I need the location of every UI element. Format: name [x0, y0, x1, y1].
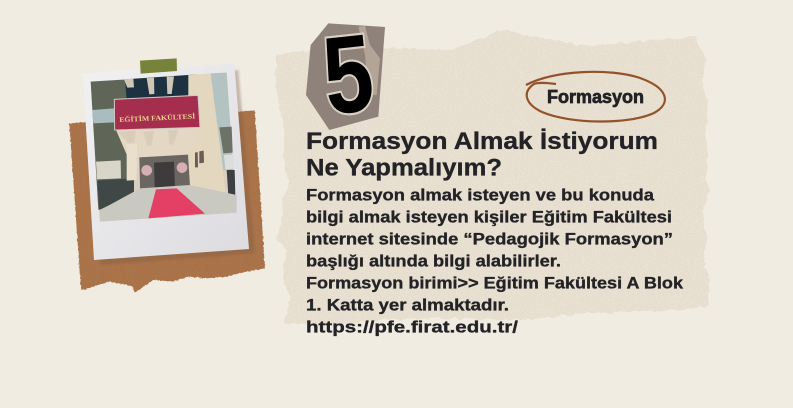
badge label: Formasyon	[547, 86, 644, 107]
badge: Formasyon in hand-drawn oval	[526, 72, 665, 122]
body text	[306, 186, 684, 336]
photo: building entrance	[91, 73, 237, 222]
body text: internet sitesinde “Pedagojik Formasyon”	[306, 230, 673, 248]
red building sign	[114, 95, 200, 130]
body text: 1. Katta yer almaktadır.	[306, 296, 509, 314]
panel: polaroid photo	[83, 58, 255, 265]
sign lettering: EĞİTİM FAKÜLTESİ	[119, 113, 196, 124]
panel: torn canvas paper	[275, 29, 710, 325]
body text: Formasyon birimi>> Eğitim Fakültesi A Blok	[306, 274, 684, 292]
title	[306, 128, 658, 182]
body text: başlığı altında bilgi alabilirler.	[306, 252, 561, 270]
icon: cut-out number five	[306, 12, 385, 139]
title: Formasyon Almak İstiyorum	[306, 128, 658, 155]
red carpet	[148, 188, 205, 218]
oval	[526, 72, 665, 122]
title: Ne Yapmalıyım?	[306, 154, 502, 182]
number: 5	[317, 12, 379, 139]
washi tape	[140, 58, 177, 74]
body text: Formasyon almak isteyen ve bu konuda	[306, 186, 655, 204]
body text: bilgi almak isteyen kişiler Eğitim Fakültesi	[306, 208, 672, 226]
polaroid frame	[83, 63, 249, 260]
panel: kraft paper behind photo	[69, 110, 265, 293]
body text: https://pfe.firat.edu.tr/	[306, 318, 518, 336]
